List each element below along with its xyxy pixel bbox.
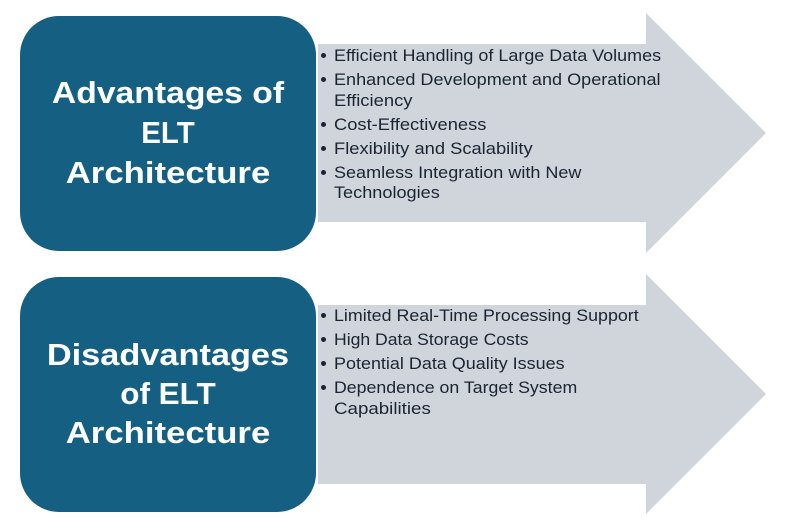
panel: disadvantages heading: of ELT <box>120 376 216 411</box>
arrow: advantages <box>318 13 766 253</box>
arrow: disadvantages <box>318 274 766 514</box>
panel: advantages heading <box>20 16 316 251</box>
text block: advantages list: Efficient Handling of Large Data Volumes <box>334 46 661 65</box>
text block: advantages list: Cost-Effectiveness <box>334 115 486 134</box>
text block: disadvantages list: Limited Real-Time Processing Support <box>334 306 639 325</box>
panel: advantages heading: Advantages of <box>52 75 284 110</box>
text block: advantages list: Seamless Integration with New <box>334 163 581 182</box>
text block: disadvantages list: Capabilities <box>334 399 431 418</box>
text block: disadvantages list: High Data Storage Costs <box>334 330 529 349</box>
text block: advantages list <box>321 46 661 202</box>
panel: advantages heading: ELT <box>141 115 195 150</box>
text block: advantages list: Flexibility and Scalability <box>334 139 533 158</box>
text block: advantages list: Enhanced Development and Operational <box>334 70 661 89</box>
text block: disadvantages list: Dependence on Target System <box>334 378 577 397</box>
text block: advantages list: Efficiency <box>334 91 413 110</box>
text block: disadvantages list: Potential Data Quality Issues <box>334 354 565 373</box>
panel: advantages heading: Architecture <box>66 155 270 190</box>
panel: disadvantages heading: Architecture <box>66 415 270 450</box>
panel: disadvantages heading: Disadvantages <box>47 337 289 372</box>
text block: advantages list: Technologies <box>334 183 440 202</box>
text block: disadvantages list <box>321 306 639 418</box>
panel: disadvantages heading <box>20 277 316 512</box>
